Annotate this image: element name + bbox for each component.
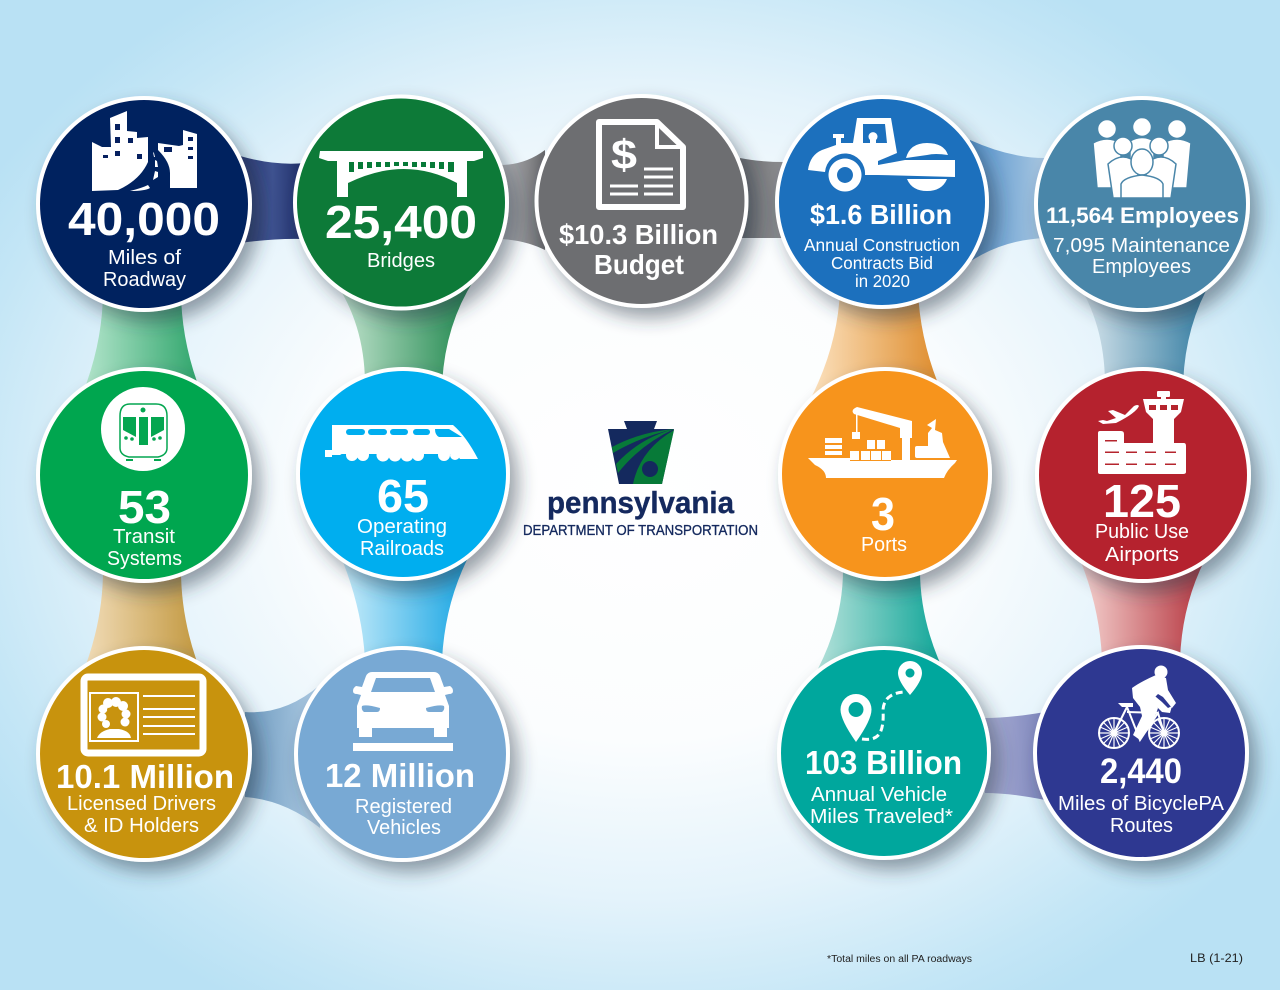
connector: roadway to bridges <box>240 156 305 243</box>
label: registered vehicles <box>355 796 452 839</box>
wordmark subtitle: DEPARTMENT OF TRANSPORTATION <box>523 522 758 539</box>
stat: $1.6 billion: $1.6 Billion <box>810 199 952 230</box>
stat: 25,400: 25,400 <box>325 196 477 248</box>
icon: locomotive <box>325 425 478 462</box>
panel: ports <box>780 369 990 579</box>
label: registered vehicles: Registered <box>355 796 452 818</box>
connector: budget to construction <box>740 158 785 238</box>
panel: airports <box>1037 369 1249 581</box>
connector: bridges to budget <box>500 150 545 250</box>
panel: bridges <box>295 96 507 308</box>
panel: vehicles <box>296 648 508 860</box>
icon: license card <box>84 677 203 753</box>
panel: construction contracts <box>777 97 987 307</box>
label: public use airports: Public Use <box>1095 521 1189 543</box>
connector: bridges to railroads <box>334 280 474 385</box>
label: annual vehicle miles traveled: Annual Vehicle <box>811 784 947 806</box>
connector: railroads to vehicles <box>338 550 472 660</box>
stat: 125: 125 <box>1103 475 1181 527</box>
icon: budget document <box>599 122 683 207</box>
label: maintenance employees: 7,095 Maintenance <box>1053 234 1230 257</box>
label: transit systems: Systems <box>107 548 182 570</box>
stat: $10.3 billion budget <box>559 219 718 280</box>
panel: railroads <box>298 369 508 579</box>
label: operating railroads <box>357 516 447 560</box>
icon: road roller <box>808 118 955 192</box>
label: operating railroads: Operating <box>357 516 447 538</box>
connector: transit to drivers <box>80 570 204 680</box>
icon: group of people <box>1093 118 1191 198</box>
icon: car <box>353 672 453 751</box>
icon: keystone <box>608 421 674 484</box>
panel: employees <box>1036 98 1248 310</box>
stat: 11,564 employees: 11,564 Employees <box>1046 203 1239 228</box>
label: miles of roadway: Roadway <box>103 269 186 291</box>
label: maintenance employees <box>1053 234 1230 278</box>
connector: employees to airports <box>1076 280 1212 385</box>
label: operating railroads: Railroads <box>360 538 444 560</box>
label: miles of roadway: Miles of <box>108 247 181 269</box>
label: public use airports <box>1095 521 1189 566</box>
icon: airport tower and plane <box>1098 391 1186 474</box>
label: licensed drivers and id holders: Licensed Drivers <box>67 793 216 815</box>
wordmark: pennsylvania <box>547 485 735 520</box>
icon: city and road <box>92 111 197 191</box>
label: bridges: Bridges <box>367 250 435 272</box>
connector: ports to vehicle miles <box>812 570 948 680</box>
connector: drivers to vehicles <box>245 685 320 828</box>
connector: airports to bicycle routes <box>1076 550 1210 660</box>
label: licensed drivers and id holders <box>67 793 216 837</box>
icon: cargo ship <box>808 407 957 478</box>
label: annual construction contracts <box>804 235 960 291</box>
stat: 53: 53 <box>118 481 171 533</box>
label: miles of bicyclepa routes: Miles of BicyclePA <box>1058 793 1225 815</box>
footnote: *Total miles on all PA roadways <box>827 954 972 965</box>
stat: 10.1 million: 10.1 Million <box>56 758 234 795</box>
label: annual construction contracts: Annual Construction <box>804 235 960 255</box>
panel: budget <box>536 96 746 306</box>
label: miles of bicyclepa routes <box>1058 793 1225 837</box>
stat: 3: 3 <box>871 488 895 540</box>
stat: 103 billion: 103 Billion <box>805 744 962 781</box>
label: maintenance employees: Employees <box>1092 255 1191 278</box>
label: licensed drivers and id holders: & ID Holders <box>84 815 199 837</box>
icon: map pins with route <box>840 661 922 742</box>
panel: drivers <box>38 648 250 860</box>
connector: roadway to transit <box>80 290 204 400</box>
panel: budget: $ <box>611 131 637 178</box>
panel: vehicle miles <box>779 648 989 858</box>
panel: roadway <box>38 98 250 310</box>
label: annual vehicle miles traveled <box>810 784 953 828</box>
panel: bicycle routes <box>1035 647 1247 859</box>
connector: construction to ports <box>810 290 945 400</box>
label: annual construction contracts: Contracts Bid <box>831 253 933 273</box>
publication code: LB (1-21) <box>1190 951 1243 965</box>
connector: construction to employees <box>965 140 1045 265</box>
stat: $10.3 billion budget: Budget <box>594 249 684 280</box>
stat: 40,000: 40,000 <box>68 193 220 245</box>
label: ports: Ports <box>861 534 907 556</box>
logo: pennsylvania department of transportation <box>523 421 758 539</box>
stat: 12 million: 12 Million <box>325 757 475 794</box>
label: miles of roadway <box>103 247 186 291</box>
panel: transit <box>38 369 250 581</box>
label: registered vehicles: Vehicles <box>367 817 441 839</box>
connector: vehicle miles to bicycle routes <box>985 712 1045 800</box>
icon: transit train <box>101 387 185 471</box>
icon: cyclist <box>1099 666 1179 748</box>
label: annual vehicle miles traveled: Miles Traveled* <box>810 806 953 828</box>
label: annual construction contracts: in 2020 <box>855 271 910 291</box>
stat: $10.3 billion budget: $10.3 Billion <box>559 219 718 250</box>
label: miles of bicyclepa routes: Routes <box>1110 815 1173 837</box>
label: transit systems <box>107 526 182 570</box>
label: public use airports: Airports <box>1105 544 1179 566</box>
icon: bridge <box>319 151 483 197</box>
stat: 65: 65 <box>377 470 429 522</box>
label: transit systems: Transit <box>113 526 175 548</box>
stat: 2,440: 2,440 <box>1100 752 1182 791</box>
